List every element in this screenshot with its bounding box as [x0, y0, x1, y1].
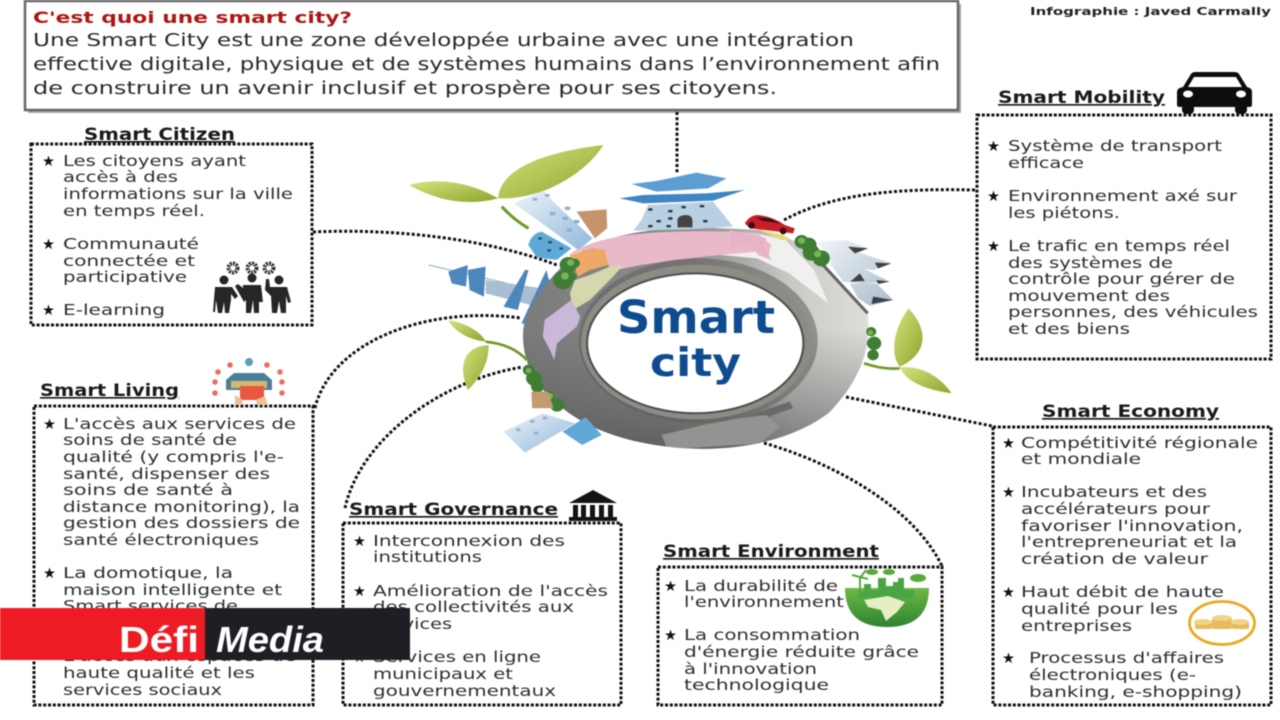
icon: left spire [429, 265, 554, 325]
panel: Smart Living: santé, dispenser des [63, 465, 270, 483]
heading: Smart Citizen: Smart Citizen [84, 125, 235, 144]
icon: red car [745, 215, 795, 234]
panel: Smart Governance: institutions [373, 548, 482, 566]
panel: Smart Citizen: ★ [42, 154, 55, 170]
panel: Smart Mobility: ★ [987, 139, 1000, 155]
panel: Smart Environment: technologique [684, 676, 829, 694]
panel: Smart Living [34, 381, 313, 705]
panel: Smart Economy: ★ [1002, 485, 1015, 501]
panel: Smart Mobility [977, 88, 1271, 359]
icon: bottom buildings [504, 392, 602, 453]
panel: Smart Mobility: Système de transport [1008, 137, 1222, 155]
panel: Smart Citizen: ★ [42, 303, 55, 319]
panel: Smart Economy: création de valeur [1021, 550, 1209, 568]
panel: definition [25, 1, 961, 113]
panel: Smart Mobility: ★ [987, 189, 1000, 205]
text block: definition: effective digitale, physique et de systèmes humains dans l’environnement afin [33, 55, 940, 75]
panel: Smart Citizen: en temps réel. [63, 202, 205, 220]
ring [578, 258, 818, 423]
panel: Smart Citizen: informations sur la ville [63, 185, 293, 203]
panel: Smart Governance: municipaux et [373, 665, 513, 683]
panel: Smart Environment: d'énergie réduite grâce [684, 643, 919, 661]
icon: people with gears [213, 264, 291, 313]
connectors [313, 112, 992, 566]
panel: Smart Living: haute qualité et les [63, 664, 255, 682]
panel: Smart Citizen: connectée et [63, 252, 195, 270]
icon: right leaves [864, 308, 952, 393]
panel: Smart Environment: La consommation [684, 626, 860, 644]
panel: Smart Living: soins de santé de [63, 431, 237, 449]
panel: Smart Economy: favoriser l'innovation, [1021, 517, 1243, 535]
panel: Smart Environment: l'environnement [684, 593, 844, 611]
heading: Smart Mobility: Smart Mobility [998, 88, 1165, 107]
panel: Smart Economy [993, 402, 1271, 705]
panel: Smart Mobility: personnes, des véhicules [1008, 303, 1258, 321]
panel: Smart Mobility: efficace [1008, 154, 1084, 172]
panel: Smart Living: ★ [43, 566, 56, 582]
panel: Smart Living: L'accès aux espaces de [63, 647, 296, 665]
panel: Smart Governance: Services en ligne [373, 648, 541, 666]
panel: Smart Environment: ★ [664, 628, 677, 644]
icon: institution building [569, 490, 617, 521]
panel: Smart Living: santé électroniques [63, 531, 259, 549]
heading: Smart Governance: Smart Governance [349, 500, 558, 519]
center label: city [650, 341, 741, 386]
panel: Smart Economy: banking, e-shopping) [1029, 683, 1242, 701]
map: continents [543, 228, 828, 448]
panel: Smart Living: distance monitoring), la [63, 498, 300, 516]
text block: definition: de construire un avenir inclusif et prospère pour ses citoyens. [33, 79, 777, 99]
panel: Smart Environment: à l'innovation [684, 660, 817, 678]
panel: Smart Mobility: les piétons. [1008, 204, 1120, 222]
logo banner: Défi Media: Media [216, 619, 324, 660]
panel: Smart Mobility: ★ [987, 239, 1000, 255]
panel: Smart Governance: des collectivités aux [373, 598, 574, 616]
icon: green earth [845, 569, 929, 627]
panel: Smart Environment: ★ [664, 579, 677, 595]
panel: Smart Governance: ★ [353, 584, 366, 600]
panel: Smart Economy: Compétitivité régionale [1021, 434, 1258, 452]
panel: Smart Economy: ★ [1002, 651, 1015, 667]
panel: Smart Economy: accélérateurs pour [1021, 500, 1211, 518]
panel: Smart Governance [343, 500, 621, 705]
globe body [523, 228, 868, 449]
panel: Smart Citizen: ★ [42, 237, 55, 253]
heading: Smart Economy: Smart Economy [1042, 402, 1219, 421]
icon: car [1177, 72, 1252, 114]
panel: Smart Economy: Processus d'affaires [1029, 649, 1224, 667]
panel: Smart Living: qualité (y compris l'e- [63, 448, 284, 466]
heading: definition: C'est quoi une smart city? [33, 8, 352, 27]
panel: Smart Living: soins de santé à [63, 481, 233, 499]
panel: Smart Citizen: E-learning [63, 301, 165, 319]
credit: Infographie : Javed Carmally [1030, 5, 1271, 18]
panel: Smart Citizen: participative [63, 268, 187, 286]
icon: coins [1190, 602, 1254, 644]
center label [617, 291, 775, 386]
panel: Smart Governance: gouvernementaux [373, 682, 556, 700]
panel: Smart Economy: et mondiale [1021, 450, 1141, 468]
panel: Smart Environment [658, 542, 942, 705]
panel: Smart Citizen [31, 125, 312, 325]
panel: Smart Mobility: et des biens [1008, 320, 1130, 338]
panel: Smart Citizen: Communauté [63, 235, 199, 253]
illustration: globe with city [409, 145, 952, 453]
panel: Smart Economy: qualité pour les [1021, 600, 1178, 618]
panel: Smart Governance: ★ [353, 534, 366, 550]
panel: Smart Citizen: Les citoyens ayant [63, 152, 246, 170]
panel: Smart Mobility: Le trafic en temps réel [1008, 237, 1230, 255]
icon: tower buildings [514, 191, 607, 260]
panel: Smart Living: Smart services de [63, 597, 238, 615]
panel: Smart Mobility: des systèmes de [1008, 254, 1173, 272]
panel: Smart Economy: ★ [1002, 585, 1015, 601]
center label: Smart [617, 291, 775, 344]
panel: Smart Environment: La durabilité de [684, 577, 838, 595]
logo banner: Défi Media: Défi [119, 619, 199, 660]
icon: trees [523, 235, 881, 412]
panel: Smart Living: La domotique, la [63, 564, 233, 582]
logo banner: Défi Media [0, 608, 410, 660]
text block: definition [33, 31, 940, 99]
icon: left leaves [448, 320, 527, 390]
panel: Smart Mobility: mouvement des [1008, 287, 1170, 305]
panel: Smart Living: services sociaux [63, 681, 222, 699]
icon: smart home [212, 358, 285, 405]
icon: right fins building [816, 240, 893, 306]
panel: Smart Mobility: Environnement axé sur [1008, 187, 1238, 205]
panel: Smart Governance: Interconnexion des [373, 532, 565, 550]
panel: Smart Economy: ★ [1002, 436, 1015, 452]
panel: Smart Governance: ★ [353, 650, 366, 666]
panel: Smart Economy: électroniques (e- [1029, 666, 1196, 684]
panel: Smart Living: L'accès aux services de [63, 415, 296, 433]
panel: Smart Economy: entreprises [1021, 617, 1132, 635]
icon: top leaves [409, 145, 603, 228]
text block: definition: Une Smart City est une zone développée urbaine avec une intégration [33, 31, 854, 51]
panel: Smart Governance: Amélioration de l'accès [373, 582, 608, 600]
icon: pagoda [620, 173, 745, 231]
panel: Smart Governance: services [373, 615, 452, 633]
panel: Smart Living: gestion des dossiers de [63, 514, 300, 532]
heading: Smart Environment: Smart Environment [663, 542, 879, 561]
panel: Smart Economy: Incubateurs et des [1021, 483, 1207, 501]
panel: Smart Economy: Haut débit de haute [1021, 583, 1224, 601]
heading: Smart Living: Smart Living [40, 381, 179, 400]
panel: Smart Mobility: contrôle pour gérer de [1008, 270, 1235, 288]
panel: Smart Living: ★ [43, 417, 56, 433]
panel: Smart Living: maison intelligente et [63, 581, 282, 599]
panel: Smart Citizen: accès à des [63, 168, 178, 186]
panel: Smart Economy: l'entrepreneuriat et la [1021, 533, 1237, 551]
